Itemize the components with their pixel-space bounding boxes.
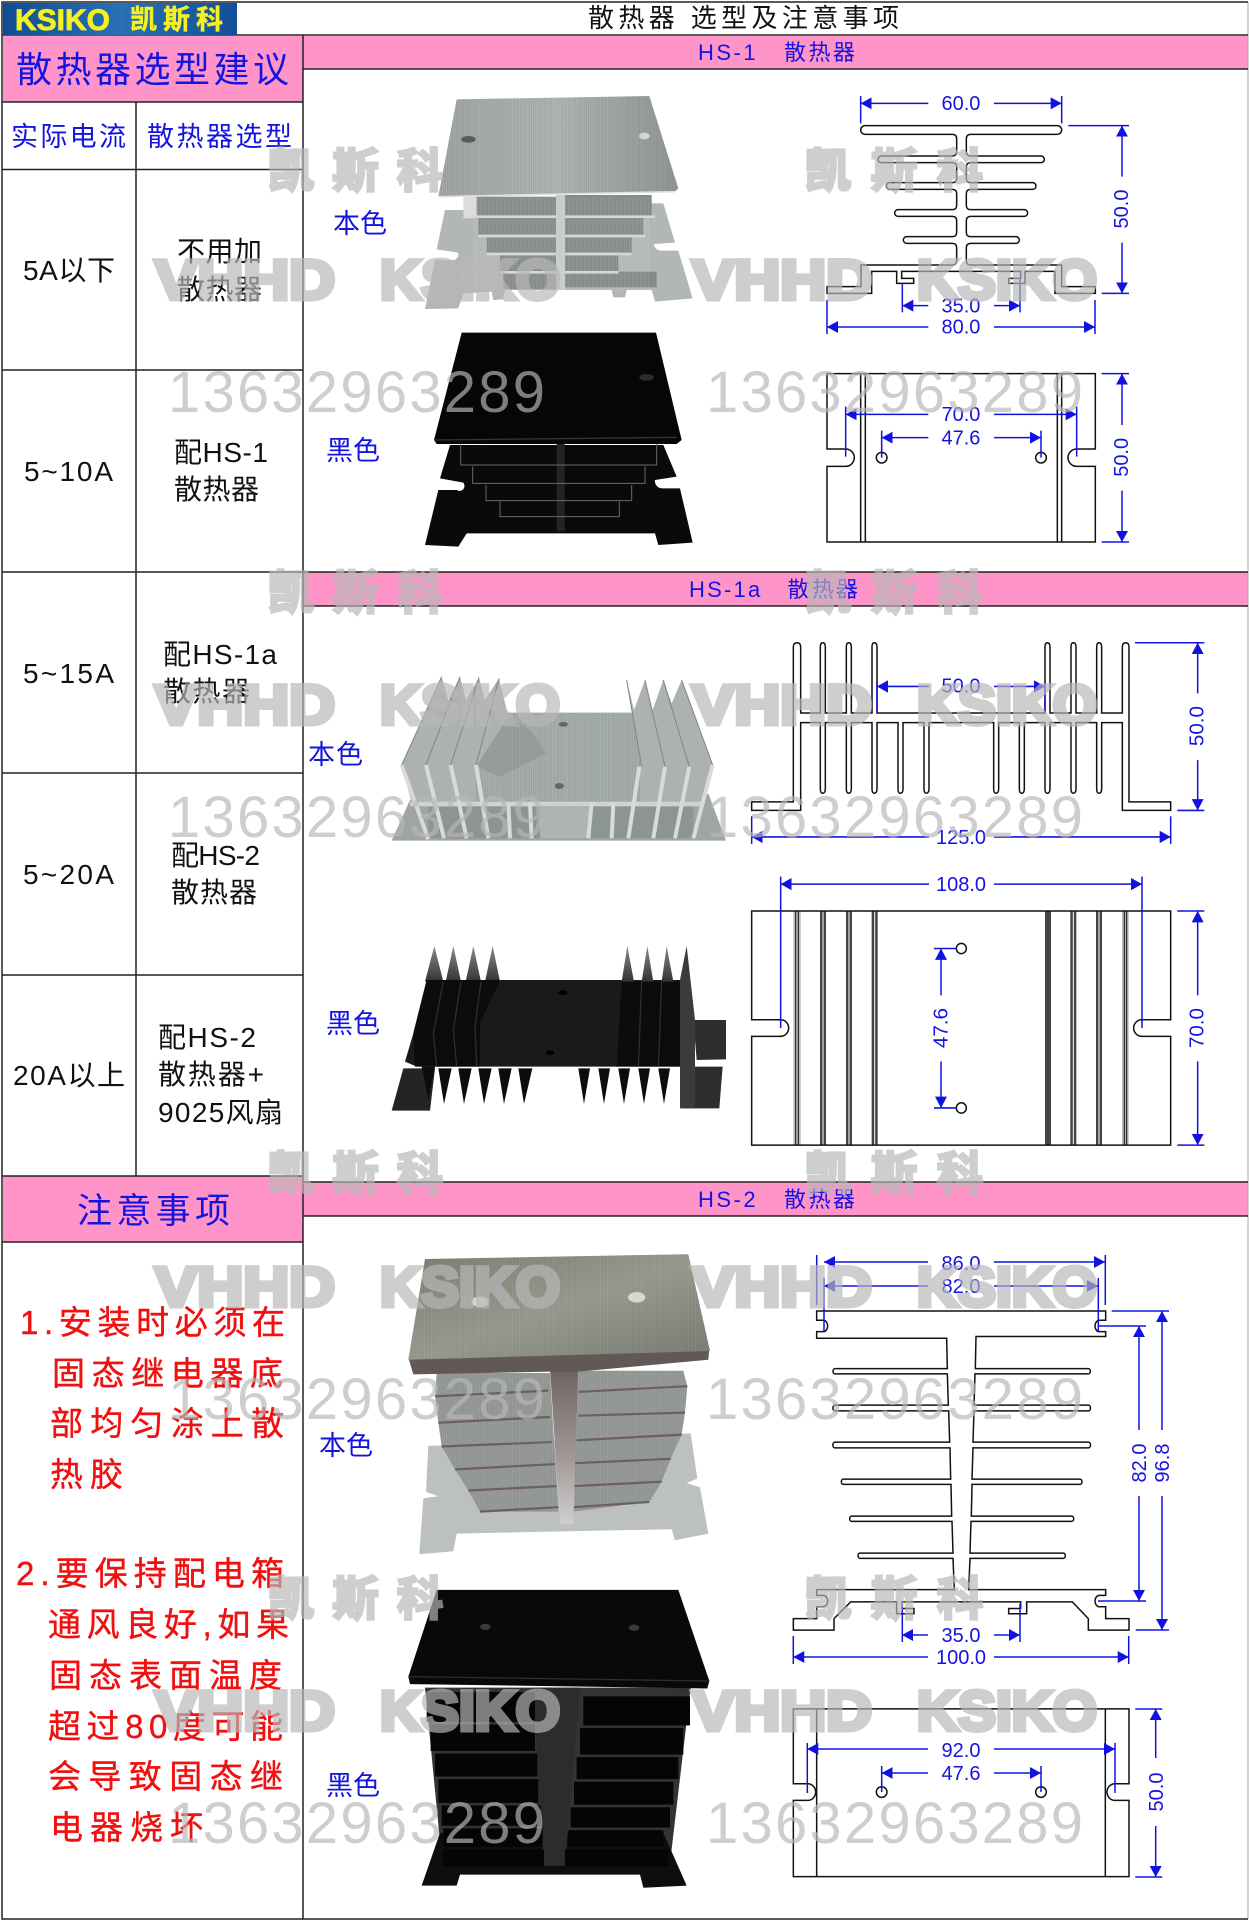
diagram: HS-2 profile dimensions: 96.8 — [1152, 1444, 1174, 1482]
table row: 20A以上: 9025风扇 — [158, 1097, 283, 1128]
watermark row 4: KSIKO — [380, 1679, 560, 1742]
table row: 5~20A: 配HS-2 — [171, 840, 260, 871]
table row: 5~20A: 散热器 — [171, 877, 257, 908]
heading: notes: 注意事项 — [77, 1192, 230, 1231]
diagram: HS-1 profile: 80.0 — [942, 317, 980, 339]
diagram: HS-2 profile outline — [793, 1311, 1129, 1630]
diagram: HS-1 plan view: 47.6 — [942, 427, 980, 449]
watermark row 4: VHHD — [692, 1679, 872, 1742]
table row: 5~15A: 散热器 — [163, 676, 250, 707]
watermark row 3: 凯斯科 — [268, 1148, 443, 1200]
table row: 5~20A: 5~20A — [23, 859, 114, 890]
photo: HS-2 black — [408, 1590, 709, 1888]
watermark row 4: VHHD — [155, 1679, 335, 1742]
pink header: left heading background — [3, 36, 303, 102]
watermark row 4: 13632963289 — [706, 1791, 1083, 1856]
watermark row 3: KSIKO — [917, 1255, 1097, 1318]
diagram: HS-1a plan view: 47.6 — [931, 1008, 952, 1048]
watermark row 3: VHHD — [155, 1255, 335, 1318]
diagram: HS-2 profile dimensions — [793, 1253, 1174, 1669]
watermark row 3: VHHD — [692, 1255, 872, 1318]
photo: HS-1a natural aluminium — [392, 677, 726, 841]
note 1: 固态继电器底 — [52, 1355, 283, 1392]
watermark row 2: KSIKO — [917, 673, 1097, 736]
diagram: HS-1 profile — [827, 93, 1133, 339]
diagram: HS-2 profile dimensions: 82.0 — [1129, 1444, 1151, 1482]
diagram: HS-1a profile — [752, 643, 1208, 849]
watermark row 3: 13632963289 — [706, 1367, 1083, 1432]
note 1: 1.安装时必须在 — [20, 1304, 285, 1341]
watermark row 4: 凯斯科 — [268, 1573, 443, 1625]
note 1: 部均匀涂上散 — [50, 1405, 284, 1442]
note 2: 会导致固态继 — [48, 1758, 283, 1795]
pink header: HS-1a bar — [303, 572, 1248, 606]
table row: 5~10A — [24, 437, 268, 505]
table row: 20A以上: 散热器+ — [158, 1059, 264, 1090]
photo: HS-1 natural aluminium — [425, 96, 693, 309]
outline: HS-1a profile — [752, 643, 1171, 810]
watermark row 2: 凯斯科 — [805, 567, 983, 619]
heading: selection advice: 散热器选型建议 — [16, 49, 289, 90]
title: 散热器 选型及注意事项 — [588, 3, 899, 33]
table row: 5~10A: 配HS-1 — [174, 437, 268, 468]
table row: 5~15A: 5~15A — [23, 658, 114, 689]
diagram: HS-2 plan dimensions: 92.0 — [942, 1740, 980, 1762]
watermark row 2 — [155, 567, 1097, 850]
label: HS-2 black: 黑色 — [326, 1771, 380, 1801]
watermark row 2: KSIKO — [380, 673, 560, 736]
watermark row 1: 13632963289 — [168, 360, 545, 425]
label: HS-1a natural colour: 本色 — [308, 740, 363, 770]
table header: actual current: 实际电流 — [11, 122, 126, 152]
watermark row 4: KSIKO — [917, 1679, 1097, 1742]
note 2: 通风良好,如果 — [48, 1606, 289, 1643]
pink header: notes heading background — [3, 1176, 303, 1242]
watermark row 1: 13632963289 — [706, 360, 1083, 425]
diagram: HS-1a plan view — [752, 874, 1208, 1145]
label: HS-1 natural colour: 本色 — [333, 209, 387, 239]
diagram: HS-1 profile: 60.0 — [942, 93, 980, 115]
table row: 5A以下: 散热器 — [177, 274, 262, 305]
diagram: HS-2 profile dimensions: 100.0 — [936, 1647, 986, 1669]
watermark row 1: KSIKO — [380, 248, 560, 311]
diagram: HS-2 plan outline — [793, 1709, 1129, 1877]
table row: 5~20A — [23, 840, 260, 908]
diagram: HS-1a profile: 50.0 — [1187, 706, 1208, 746]
photo: HS-1 black — [425, 333, 693, 547]
watermark row 2: VHHD — [692, 673, 872, 736]
label: HS-2 natural colour: 本色 — [319, 1431, 373, 1461]
note 2 — [16, 1555, 289, 1846]
watermark row 4: 凯斯科 — [805, 1573, 983, 1625]
table row: 5A以下 — [23, 236, 262, 305]
diagram: HS-1a plan view: 108.0 — [936, 874, 986, 896]
table row: 20A以上: 20A以上 — [13, 1060, 125, 1091]
watermark row 4 — [155, 1573, 1097, 1856]
table row: 5A以下: 不用加 — [177, 236, 262, 267]
table row: 5~10A: 5~10A — [24, 456, 113, 487]
table row: 20A以上: 配HS-2 — [158, 1022, 256, 1053]
diagram: HS-1 plan view — [827, 374, 1133, 542]
diagram: HS-1 plan view: 70.0 — [942, 404, 980, 426]
diagram: HS-2 plan dimensions: 50.0 — [1146, 1773, 1168, 1811]
section heading: HS-2: HS-2 散热器 — [698, 1187, 855, 1212]
diagram: HS-1 plan view: 50.0 — [1111, 438, 1133, 477]
diagram: HS-2 profile dimensions: 86.0 — [942, 1253, 980, 1275]
watermark row 2: 凯斯科 — [268, 567, 443, 619]
outline: HS-1a plan — [752, 911, 1171, 1145]
watermark row 3 — [155, 1148, 1097, 1432]
outline: HS-1 profile — [827, 126, 1095, 293]
watermark row 3: KSIKO — [380, 1255, 560, 1318]
watermark row 2: VHHD — [155, 673, 335, 736]
outline: HS-1 plan — [827, 374, 1095, 542]
note 1 — [20, 1304, 285, 1493]
watermark row 1: 凯斯科 — [805, 145, 983, 197]
diagram: HS-2 profile dimensions: 82.0 — [942, 1276, 980, 1298]
diagram: HS-1a profile: 125.0 — [936, 827, 986, 849]
table row: 5~15A — [23, 639, 277, 707]
note 1: 热胶 — [50, 1456, 123, 1493]
label: HS-1 black: 黑色 — [326, 436, 380, 466]
table header: heat sink type: 散热器选型 — [147, 122, 292, 152]
watermark row 2: 13632963289 — [706, 785, 1083, 850]
watermark row 1: VHHD — [155, 248, 335, 311]
pink header: HS-2 bar — [303, 1182, 1248, 1216]
watermark row 4: 13632963289 — [168, 1791, 545, 1856]
section heading: HS-1a: HS-1a 散热器 — [689, 577, 858, 602]
note 2: 电器烧坏 — [50, 1809, 203, 1846]
logo: KSIKO 凯斯科: KSIKO — [15, 4, 110, 37]
photo: HS-2 natural aluminium — [408, 1254, 710, 1554]
section heading: HS-1: HS-1 散热器 — [698, 40, 855, 65]
diagram: HS-1 profile: 35.0 — [942, 295, 980, 317]
photo: HS-1a black — [392, 946, 726, 1111]
diagram: HS-1 profile: 50.0 — [1111, 190, 1133, 228]
fin stripes — [793, 911, 1129, 1145]
diagram: HS-1a profile: 50.0 — [942, 675, 980, 698]
watermark row 1 — [155, 145, 1097, 425]
note 2: 固态表面温度 — [49, 1657, 282, 1694]
table row: 20A以上 — [13, 1022, 283, 1128]
diagram: HS-2 plan dimensions — [807, 1709, 1168, 1877]
watermark row 1: VHHD — [692, 248, 872, 311]
diagram: HS-2 profile dimensions: 35.0 — [942, 1625, 980, 1647]
watermark row 3: 13632963289 — [168, 1367, 545, 1432]
table row: 5A以下: 5A以下 — [23, 255, 115, 286]
table row: 5~10A: 散热器 — [174, 474, 259, 505]
watermark row 1: 凯斯科 — [268, 145, 443, 197]
note 2: 超过80度可能 — [48, 1708, 283, 1745]
label: HS-1a black: 黑色 — [326, 1009, 380, 1039]
watermark row 3: 凯斯科 — [805, 1148, 983, 1200]
logo: KSIKO 凯斯科 — [3, 3, 237, 37]
watermark row 2: 13632963289 — [168, 785, 545, 850]
table row: 5~15A: 配HS-1a — [163, 639, 277, 670]
note 2: 2.要保持配电箱 — [16, 1555, 284, 1592]
pink header: HS-1 bar — [303, 36, 1248, 69]
logo: KSIKO 凯斯科: 凯斯科 — [130, 5, 223, 35]
diagram: HS-1a plan view: 70.0 — [1187, 1008, 1208, 1048]
watermark row 1: KSIKO — [917, 248, 1097, 311]
diagram: HS-2 plan dimensions: 47.6 — [942, 1763, 980, 1785]
